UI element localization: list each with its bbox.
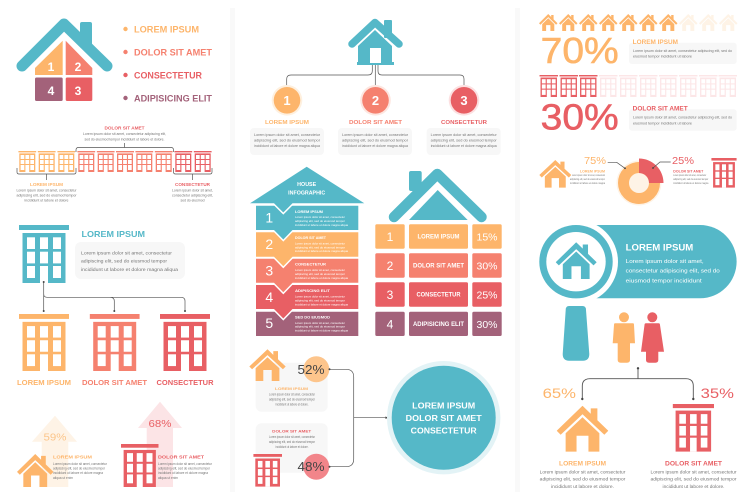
icon: woman [641, 312, 664, 363]
arrow stat: house 59%: 59% [44, 432, 67, 444]
house-shaped stacked list: incididunt ut labore et dolore magna aliqua [295, 223, 348, 227]
step 2: 2 [372, 93, 379, 108]
house-shaped stacked list: adipiscing elit, sed do eiusmod tempor [295, 246, 345, 250]
house-shaped stacked list: incididunt ut labore et dolore magna aliqua [295, 329, 348, 333]
chart: row of ten buildings with brace labels: Lorem ipsum dolor sit amet, consectetur adipiscing elit, [83, 132, 166, 136]
icon: house divided into four numbered parts [22, 22, 107, 101]
comparison card: building 48% [253, 423, 329, 487]
arrow stat: house 59% [17, 416, 108, 487]
house-shaped stacked list: 1 [265, 210, 273, 226]
house-shaped percentage table: 4 [387, 318, 394, 332]
house-shaped stacked list: SED DO EIUSMOD [295, 316, 330, 320]
comparison card: building 48%: 48% [298, 460, 324, 474]
house-shaped percentage table: 30% [476, 319, 498, 331]
step 3: 3 [460, 93, 468, 108]
step 3 [427, 85, 501, 155]
house-shaped percentage table: 30% [476, 260, 498, 272]
comparison card: building 48%: Lorem ipsum dolor sit amet, consectetur [269, 435, 316, 439]
house-shaped stacked list: Lorem ipsum dolor sit amet, consectetur [295, 268, 345, 272]
donut chart 75% / 25%: incididunt ut labore et dolore magna [570, 181, 605, 185]
house-shaped stacked list: adipiscing elit, sed do eiusmod tempor [295, 272, 345, 276]
arrow stat: building 68%: Lorem ipsum dolor sit amet, consectetur [158, 462, 213, 466]
donut chart 75% / 25%: DOLOR SIT AMET [673, 170, 704, 174]
step 3: adipiscing elit, sed do eiusmod tempor [431, 139, 498, 143]
arrow stat: house 59%: incididunt ut labore et dolore magna [53, 471, 103, 475]
donut chart 75% / 25%: adipiscing elit, sed do eiusmod tempor [570, 177, 605, 181]
chart: row of ten buildings with brace labels: DOLOR SIT AMET [104, 126, 145, 130]
icon: teal house top centre [352, 20, 399, 65]
icon: house divided into four numbered parts: 2 [75, 60, 82, 74]
house-shaped stacked list: 4 [265, 289, 273, 305]
big teal circle: CONSECTETUR [411, 426, 477, 436]
house-shaped stacked list: 5 [265, 315, 273, 331]
magnifying glass callout with house: LOREM IPSUM [626, 242, 693, 252]
house-shaped percentage table: 2 [387, 259, 394, 273]
split item: building 35%: incididunt ut labore et dolore. [662, 484, 724, 489]
step 2 [338, 85, 412, 155]
house-shaped stacked list: 2 [265, 236, 273, 252]
donut chart 75% / 25%: incididunt ut labore et dolore magna [673, 181, 709, 185]
house-shaped stacked list: incididunt ut labore et dolore magna aliqua [295, 249, 348, 253]
stat: 70% houses: LOREM IPSUM [633, 40, 678, 46]
comparison card: house 52%: Lorem ipsum dolor sit amet, consectetur [269, 392, 316, 396]
comparison card: house 52%: LOREM IPSUM [275, 386, 309, 391]
house-shaped stacked list: Lorem ipsum dolor sit amet, consectetur [295, 321, 345, 325]
donut chart 75% / 25%: Lorem ipsum dolor sit amet, consectetur [572, 173, 605, 177]
split item: house 65%: adipiscing elit, sed do eiusmod tempor [540, 476, 626, 482]
big teal circle: LOREM IPSUM [412, 402, 476, 410]
house-shaped percentage table: 15% [476, 231, 498, 243]
comparison card: house 52% [249, 349, 329, 412]
step 2: incididunt ut labore et dolore magna aliqua [342, 144, 408, 148]
split item: house 65%: 65% [543, 385, 576, 401]
chart: row of ten buildings with brace labels: consectetur adipiscing elit, [172, 194, 213, 198]
stat: 70% houses [539, 14, 738, 71]
step 2: adipiscing elit, sed do eiusmod tempor [342, 139, 409, 143]
split item: building 35%: 35% [701, 385, 734, 401]
chart: row of ten buildings with brace labels: sed do eiusmod [180, 198, 205, 202]
building hierarchy: teal parent with three children: adipiscing elit, sed do eiusmod tempor [81, 259, 167, 264]
building hierarchy: teal parent with three children: LOREM IPSUM [82, 229, 145, 239]
chart: row of ten buildings with brace labels: Lorem ipsum dolor sit amet, consectetur [16, 188, 77, 192]
arrow stat: building 68%: adipiscing elit, sed do eiusmod tempor [158, 466, 211, 470]
step 2: Lorem ipsum dolor sit amet, consectetur [342, 133, 409, 137]
step 3: incididunt ut labore et dolore magna aliqua [431, 144, 497, 148]
house-shaped percentage table [375, 171, 502, 336]
arrow stat: building 68% [121, 402, 213, 487]
house-shaped stacked list: Lorem ipsum dolor sit amet, consectetur [295, 242, 345, 246]
comparison card: building 48%: DOLOR SIT AMET [272, 428, 312, 434]
icon: house divided into four numbered parts: 3 [75, 84, 82, 98]
legend list: LOREM IPSUM [134, 24, 199, 34]
magnifying glass callout with house: consectetur adipiscing elit, sed do [626, 269, 720, 275]
house-shaped percentage table: DOLOR SIT AMET [413, 264, 464, 270]
house-shaped stacked list: Lorem ipsum dolor sit amet, consectetur [295, 295, 345, 299]
split item: building 35%: Lorem ipsum dolor sit amet, consectetur [650, 470, 737, 474]
stat: 30% buildings: eiusmod tempor incididunt ut labore [633, 121, 692, 125]
icon: house divided into four numbered parts: 4 [48, 84, 55, 98]
house-shaped stacked list: DOLOR SIT AMET [295, 236, 327, 240]
building hierarchy: teal parent with three children: Lorem ipsum dolor sit amet, consectetur [81, 251, 172, 256]
connectors from house to three steps [287, 65, 464, 86]
legend list [123, 24, 213, 104]
split item: house 65% [540, 385, 626, 489]
arrow stat: building 68%: aliqua ut enim [158, 476, 178, 480]
house-shaped stacked list: CONSECTETUR [295, 263, 326, 267]
house-shaped stacked list: 3 [265, 262, 273, 278]
stat: 70% houses: eiusmod tempor incididunt ut labore [633, 55, 692, 59]
icon: house divided into four numbered parts: 1 [48, 60, 55, 74]
building hierarchy: teal parent with three children [17, 225, 214, 387]
comparison card: house 52%: 52% [298, 363, 324, 377]
house-shaped percentage table: CONSECTETUR [416, 293, 461, 299]
magnifying glass callout with house: Lorem ipsum dolor sit amet, [626, 259, 704, 265]
magnifying glass callout with house [534, 220, 737, 361]
stat: 30% buildings [540, 75, 737, 138]
donut chart 75% / 25% [539, 156, 737, 206]
chart: row of ten buildings with brace labels: sed do eiusmod tempor incididunt ut labore et dolore. [84, 137, 165, 141]
house-shaped stacked list: LOREM IPSUM [295, 210, 323, 214]
house-shaped percentage table: 25% [476, 289, 498, 301]
house-shaped stacked list: incididunt ut labore et dolore magna aliqua [295, 302, 348, 306]
comparison card: house 52%: adipiscing elit, sed do eiusmod tempor [269, 398, 316, 402]
connector to split [581, 367, 694, 400]
arrow stat: house 59%: adipiscing elit, sed do eiusmod tempor [53, 466, 106, 470]
house-shaped percentage table: 1 [387, 230, 394, 244]
split item: house 65%: LOREM IPSUM [559, 462, 606, 468]
split item: building 35%: adipiscing elit, sed do eiusmod tempor [650, 476, 737, 482]
stat: 70% houses: Lorem ipsum dolor sit amet, consectetur adipiscing elit, sed do [633, 49, 732, 53]
step 2: DOLOR SIT AMET [349, 120, 403, 126]
building hierarchy: teal parent with three children: CONSECTETUR [156, 378, 214, 387]
step 1: LOREM IPSUM [265, 120, 309, 126]
stat: 70% houses: 70% [541, 30, 619, 71]
connector into big circle [328, 368, 388, 468]
comparison card: house 52%: incididunt ut labore et dolore. [276, 402, 309, 406]
step 1: adipiscing elit, sed do eiusmod tempor [254, 139, 321, 143]
step 1: Lorem ipsum dolor sit amet, consectetur [254, 133, 321, 137]
house-shaped percentage table: LOREM IPSUM [418, 235, 460, 241]
arrow stat: building 68%: incididunt ut labore et dolore magna [158, 471, 208, 475]
chart: row of ten buildings with brace labels: adipiscing elit, sed do eiusmod tempor [16, 194, 78, 198]
chart: row of ten buildings with brace labels: LOREM IPSUM [30, 182, 63, 187]
house-shaped stacked list: incididunt ut labore et dolore magna aliqua [295, 276, 348, 280]
arrow stat: house 59%: aliqua ut enim [53, 476, 73, 480]
house-shaped stacked list: Lorem ipsum dolor sit amet, consectetur [295, 215, 345, 219]
arrow stat: building 68%: 68% [148, 419, 172, 430]
comparison card: building 48%: incididunt ut labore et dolore. [276, 445, 309, 449]
stat: 30% buildings: 30% [541, 96, 619, 138]
house-shaped stacked list [250, 167, 364, 336]
arrow stat: house 59%: LOREM IPSUM [53, 454, 92, 460]
comparison card: building 48%: adipiscing elit, sed do eiusmod tempor [269, 440, 316, 444]
split item: house 65%: Lorem ipsum dolor sit amet, consectetur [540, 470, 626, 474]
step 1: incididunt ut labore et dolore magna aliqua [254, 144, 320, 148]
building hierarchy: teal parent with three children: incididunt ut labore et dolore magna aliqua [81, 267, 178, 272]
house-shaped stacked list: adipiscing elit, sed do eiusmod tempor [295, 325, 345, 329]
house-shaped stacked list: INFOGRAPHIC [288, 190, 326, 196]
chart: row of ten buildings with brace labels [16, 126, 213, 202]
arrow stat: building 68%: DOLOR SIT AMET [158, 454, 204, 460]
split item: building 35%: DOLOR SIT AMET [665, 462, 722, 468]
legend list: ADIPISICING ELIT [134, 94, 212, 104]
magnifying glass callout with house: eiusmod tempor incididunt [626, 279, 702, 285]
chart: row of ten buildings with brace labels: Lorem ipsum dolor sit amet, [172, 188, 213, 192]
split item: building 35% [650, 385, 737, 489]
house-shaped stacked list: adipiscing elit, sed do eiusmod tempor [295, 219, 345, 223]
donut chart 75% / 25%: LOREM IPSUM [580, 170, 605, 174]
chart: row of ten buildings with brace labels: CONSECTETUR [175, 182, 211, 187]
donut chart 75% / 25%: Lorem ipsum dolor sit amet, consectetur [673, 173, 706, 177]
stat: 30% buildings: DOLOR SIT AMET [633, 106, 688, 112]
house-shaped percentage table: ADIPISICING ELIT [413, 322, 464, 328]
big teal circle: DOLOR SIT AMET [406, 414, 482, 423]
legend list: DOLOR SIT AMET [134, 48, 213, 58]
step 1 [250, 85, 324, 155]
donut chart 75% / 25%: adipiscing elit, sed do eiusmod tempor [673, 177, 708, 181]
legend list: CONSECTETUR [134, 70, 202, 80]
stat: 30% buildings: Lorem ipsum dolor sit amet, consectetur adipiscing elit, sed do [633, 116, 732, 120]
split item: house 65%: incididunt ut labore et dolore. [551, 484, 614, 489]
building hierarchy: teal parent with three children: DOLOR SIT AMET [82, 378, 147, 387]
chart: row of ten buildings with brace labels: incididunt ut labore et dolore [24, 198, 69, 202]
icon: man [613, 312, 635, 363]
step 1: 1 [283, 93, 291, 108]
house-shaped stacked list: adipiscing elit, sed do eiusmod tempor [295, 299, 345, 303]
big teal circle [387, 361, 500, 474]
arrow stat: house 59%: Lorem ipsum dolor sit amet, consectetur [53, 462, 108, 466]
donut chart 75% / 25%: 25% [672, 156, 694, 167]
step 3: Lorem ipsum dolor sit amet, consectetur [431, 133, 498, 137]
building hierarchy: teal parent with three children: LOREM IPSUM [17, 378, 71, 387]
donut chart 75% / 25%: 75% [584, 156, 606, 167]
step 3: CONSECTETUR [441, 120, 487, 126]
house-shaped stacked list: ADIPISCING ELIT [295, 289, 331, 293]
house-shaped percentage table: 3 [387, 288, 394, 302]
house-shaped stacked list: HOUSE [297, 182, 317, 188]
